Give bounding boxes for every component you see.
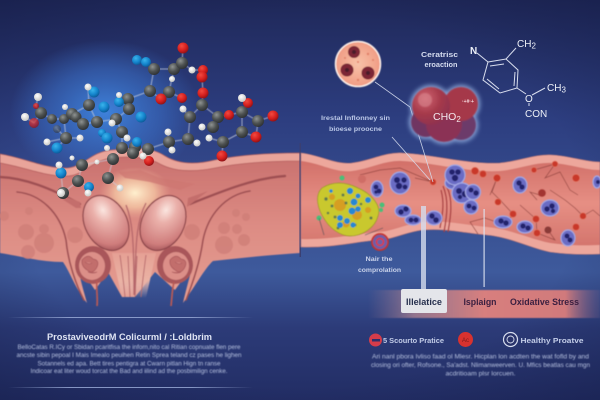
molecule blob CHO2 <box>409 85 480 144</box>
chemical structure <box>470 39 566 120</box>
text: healthy protive: Healthy Proatve <box>520 336 584 345</box>
text: CH2: CH <box>517 39 531 50</box>
panel: right tissue vessel <box>300 143 600 257</box>
body text: right: closing ori ofter, Rofsone., Sa'adst. Nlimanweerven. U. Mfics beatlas cau mgn <box>371 363 590 369</box>
divider bottom <box>8 387 253 388</box>
text: CH3: CH <box>547 83 561 94</box>
label: compromised: Nair the <box>366 256 393 263</box>
blob halo <box>409 85 480 144</box>
body text: right: acdritioam plsr lorcuen. <box>446 372 516 378</box>
body text: left: ancste sibin pepoal I Mais Imealo peuihen Retin Sprea teland cz pases he lighen <box>16 353 242 359</box>
label: creatine reaction <box>421 50 458 69</box>
blue cells <box>371 165 600 246</box>
right ovary <box>157 246 193 306</box>
rating row <box>369 332 584 347</box>
central warm glow <box>99 167 171 219</box>
text: CON: CON <box>525 109 547 120</box>
molecule: ball and stick <box>21 42 278 199</box>
oxygen atoms <box>29 42 278 166</box>
pointer bar <box>421 206 426 290</box>
text: CHO2: 2 <box>456 115 461 124</box>
red nodes <box>358 161 586 236</box>
text: Isplaign: Isplaign <box>464 297 496 307</box>
carbon atoms <box>35 57 264 199</box>
body text: left: BelloCatas R.ICy or Sbidan pcaritfisa the inforn,nito cal Ritian copnuate flen pere <box>18 345 241 351</box>
label: compromised: comprolation <box>358 267 401 274</box>
duct ends <box>62 196 81 208</box>
left gland <box>74 188 138 258</box>
molecule glow <box>10 40 200 184</box>
text: Illelatice: Illelatice <box>406 297 442 307</box>
label: compromised <box>358 256 401 274</box>
internal ducts <box>0 176 285 300</box>
yellow cluster <box>316 176 384 236</box>
label: inflammation process: Irestal Inflonney sin <box>321 115 390 122</box>
callout leader lines <box>375 82 433 182</box>
text: CHO2: CHO <box>433 111 456 123</box>
left ovary <box>75 246 111 306</box>
body text: right: Ari nanl pbora Ivliso faad ol Mlesr. Hicplan lon acdten the wat fofld by and <box>372 354 589 360</box>
blob body <box>411 87 478 142</box>
text: Oxidative Stress: Oxidative Stress <box>510 297 579 307</box>
body text: right <box>371 354 590 378</box>
icon: AC: Ac <box>462 338 469 344</box>
icon: AC <box>458 332 473 347</box>
vessel divider <box>300 143 301 257</box>
vessel wall <box>301 153 600 254</box>
text: CH3: 3 <box>561 86 566 94</box>
text: N: N <box>470 46 477 57</box>
label: creatine reaction: eroaction <box>424 60 458 69</box>
cleft folds <box>440 186 451 232</box>
upper wall <box>0 148 300 176</box>
tissue rounds <box>0 207 250 259</box>
body text: left <box>16 345 242 375</box>
panel: left tissue anatomy <box>0 148 300 306</box>
nitrogen atoms <box>52 55 151 192</box>
heading: ProstaviveodrM Colicurml / :Loldbrim <box>47 332 212 342</box>
right gland <box>131 188 195 258</box>
target marker <box>372 234 388 250</box>
icon: source <box>369 334 382 346</box>
text: blob dots: ·+#·+ <box>462 99 474 105</box>
capillary network <box>360 164 600 240</box>
bonds <box>25 48 273 193</box>
legend box <box>401 289 447 313</box>
text: O: O <box>525 94 533 105</box>
lumen <box>301 161 600 245</box>
text: source protise: 5 Scourto Pratice <box>383 336 444 345</box>
legend bar <box>368 289 600 318</box>
funnel tubes <box>120 203 146 297</box>
hydrogen atoms <box>21 66 246 197</box>
label: creatine reaction: Ceratrisc <box>421 50 458 59</box>
central funnel <box>112 253 156 298</box>
pointer line <box>484 209 485 287</box>
body text: left: Sotannels ed apa. Bett tires pentigra at Cwarn pitlan Hign tn ranse <box>38 362 221 368</box>
tissue body <box>0 148 300 303</box>
divider top <box>8 317 253 318</box>
icon: healthy <box>504 332 518 346</box>
right blotches <box>118 170 195 190</box>
label: inflammation process <box>321 115 390 133</box>
icon: tissue sample circle <box>336 42 380 86</box>
body text: left: Indicoar eat liter woud torcat the Bad and iilind ad the posbimilign cenke. <box>30 369 228 375</box>
label: inflammation process: bioese proocne <box>329 126 382 133</box>
text: CH2: 2 <box>531 42 536 50</box>
